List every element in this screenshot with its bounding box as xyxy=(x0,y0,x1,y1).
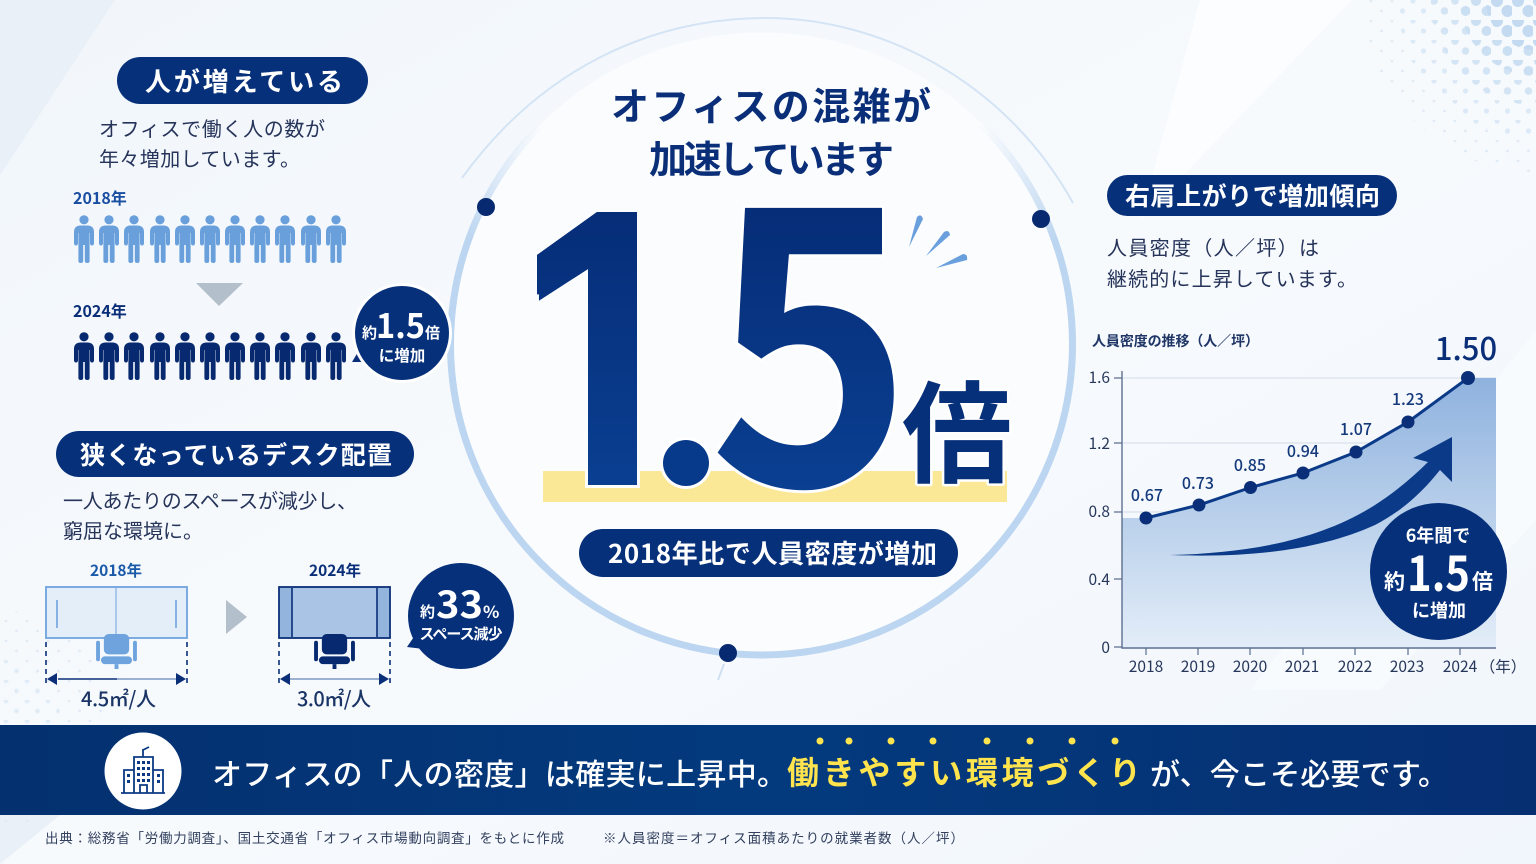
desk 2024: 2024年 xyxy=(309,559,361,581)
callout: 33%: スペース減少 xyxy=(420,623,502,644)
text block: 年々増加しています。 xyxy=(99,143,300,172)
footer notes: 出典：総務省「労働力調査」、国土交通省「オフィス市場動向調査」をもとに作成 xyxy=(45,827,564,847)
callout: 33% xyxy=(407,563,514,669)
text block xyxy=(99,113,325,172)
big number 1.5倍: 5 xyxy=(709,51,913,593)
x axis labels: 2023 xyxy=(1390,655,1424,677)
desk 2018 xyxy=(46,559,187,712)
panel: trend xyxy=(1088,175,1526,677)
data labels: 0.85 xyxy=(1234,452,1266,476)
callout: 1.5x: 1.5 xyxy=(376,299,425,348)
banner message: オフィスの「人の密度」は確実に上昇中。 xyxy=(212,750,787,794)
icon: sparks xyxy=(909,215,967,268)
big number 1.5倍: . xyxy=(632,28,772,605)
highlight bar xyxy=(543,471,1007,502)
data points xyxy=(1140,371,1475,524)
text block: 継続的に上昇しています。 xyxy=(1107,263,1357,292)
data labels xyxy=(1131,386,1424,506)
y axis labels: 1.2 xyxy=(1088,432,1110,454)
subtitle pill xyxy=(579,529,958,577)
callout: 33%: 約 xyxy=(420,601,435,622)
heading pill: 右肩上がりで増加傾向 xyxy=(1125,177,1380,213)
arrow down xyxy=(196,283,243,306)
banner message: 働きやすい環境づくり xyxy=(787,748,1141,794)
heading pill xyxy=(56,431,414,477)
text block: オフィスで働く人の数が xyxy=(99,113,325,142)
desk 2024 xyxy=(279,559,390,712)
footer notes xyxy=(45,827,964,847)
x axis labels: 2024 xyxy=(1443,655,1478,677)
callout: 6 years: 1.5 xyxy=(1407,535,1470,605)
banner xyxy=(0,725,1536,815)
central circle xyxy=(450,18,1073,680)
title: オフィスの混雑が xyxy=(611,76,931,131)
desk 2018: 2018年 xyxy=(90,559,142,581)
data labels: 0.73 xyxy=(1182,470,1214,494)
line chart: 1.50 xyxy=(1435,324,1497,369)
x axis labels: 2018 xyxy=(1129,655,1163,677)
banner message: が、今こそ必要です。 xyxy=(1150,750,1448,794)
x axis labels: 2022 xyxy=(1338,655,1372,677)
x axis labels: 2021 xyxy=(1285,655,1319,677)
data labels: 1.23 xyxy=(1392,386,1424,410)
y axis labels: 0.8 xyxy=(1088,500,1110,522)
heading pill: 狭くなっているデスク配置 xyxy=(80,436,392,472)
panel: desks xyxy=(46,431,514,712)
callout: 6 years xyxy=(1370,503,1507,640)
text block xyxy=(63,485,357,544)
panel: people increasing xyxy=(73,57,452,383)
callout: 6 years: に増加 xyxy=(1412,597,1466,623)
subtitle pill: 2018年比で人員密度が増加 xyxy=(608,534,937,571)
y axis labels: 0 xyxy=(1101,636,1110,658)
callout: 1.5x: 約 xyxy=(362,322,377,343)
title xyxy=(611,76,931,184)
big number 1.5倍: 倍 xyxy=(902,346,1012,506)
big number 1.5倍 xyxy=(480,23,1012,605)
y axis labels: 0.4 xyxy=(1088,568,1110,590)
title: 加速しています xyxy=(649,129,894,184)
text block: 人員密度（人／坪）は xyxy=(1107,232,1319,261)
big number 1.5倍: 1 xyxy=(480,23,722,600)
label 2018: 2018年 xyxy=(73,185,127,209)
callout: 6 years: 倍 xyxy=(1472,566,1493,596)
heading pill: 人が増えている xyxy=(145,62,343,99)
x axis labels: 2020 xyxy=(1233,655,1267,677)
arrow right xyxy=(226,600,247,634)
label 2024: 2024年 xyxy=(73,298,127,322)
callout: 1.5x: 倍 xyxy=(425,322,440,343)
y axis labels: 1.6 xyxy=(1088,366,1110,388)
icon row: people 2018 xyxy=(74,215,346,263)
icon: office building xyxy=(104,732,182,810)
data labels: 0.67 xyxy=(1131,482,1163,506)
text block: 一人あたりのスペースが減少し、 xyxy=(63,485,357,514)
heading pill xyxy=(117,57,368,104)
growth arrow xyxy=(1170,437,1452,556)
data labels: 0.94 xyxy=(1287,438,1319,462)
x axis labels: 2019 xyxy=(1181,655,1215,677)
banner message xyxy=(212,748,1448,794)
callout: 6 years: 約 xyxy=(1384,566,1405,596)
callout: 33%: 33 xyxy=(436,575,483,629)
footer notes: ※人員密度＝オフィス面積あたりの就業者数（人／坪） xyxy=(603,827,964,847)
desk 2024: 3.0㎡/人 xyxy=(297,683,371,712)
x axis labels: （年） xyxy=(1480,655,1526,677)
y axis labels xyxy=(1088,366,1110,658)
callout: 1.5x xyxy=(352,283,452,383)
x axis labels xyxy=(1129,655,1526,677)
icon row: people 2024 xyxy=(74,332,346,380)
emphasis dots xyxy=(816,738,1118,744)
callout: 1.5x: に増加 xyxy=(379,344,425,366)
line chart: 人員密度の推移（人／坪） xyxy=(1092,331,1259,351)
text block: 窮屈な環境に。 xyxy=(63,515,203,544)
data labels: 1.07 xyxy=(1340,416,1372,440)
text block xyxy=(1107,232,1357,292)
callout: 33%: % xyxy=(483,598,499,623)
data line xyxy=(1146,378,1468,518)
callout: 6 years: 6年間で xyxy=(1406,522,1470,548)
line chart xyxy=(1088,324,1526,677)
desk 2018: 4.5㎡/人 xyxy=(81,683,156,712)
